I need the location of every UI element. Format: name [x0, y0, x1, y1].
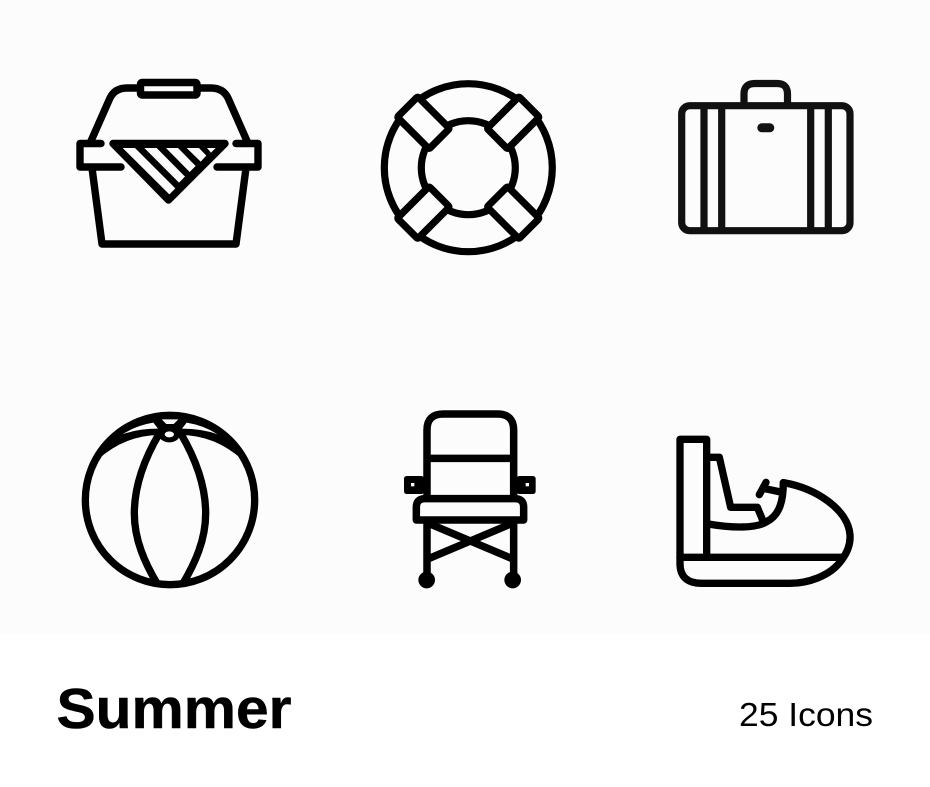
icon: suitcase [682, 84, 850, 231]
icon: beach ball [85, 413, 255, 585]
icon: life buoy [384, 84, 552, 252]
icon count label: 25 Icons [739, 697, 873, 734]
title: Summer [56, 677, 292, 741]
icon: bumper car [680, 439, 850, 583]
icon: folding chair [404, 414, 536, 588]
icon: picnic basket [80, 82, 258, 244]
